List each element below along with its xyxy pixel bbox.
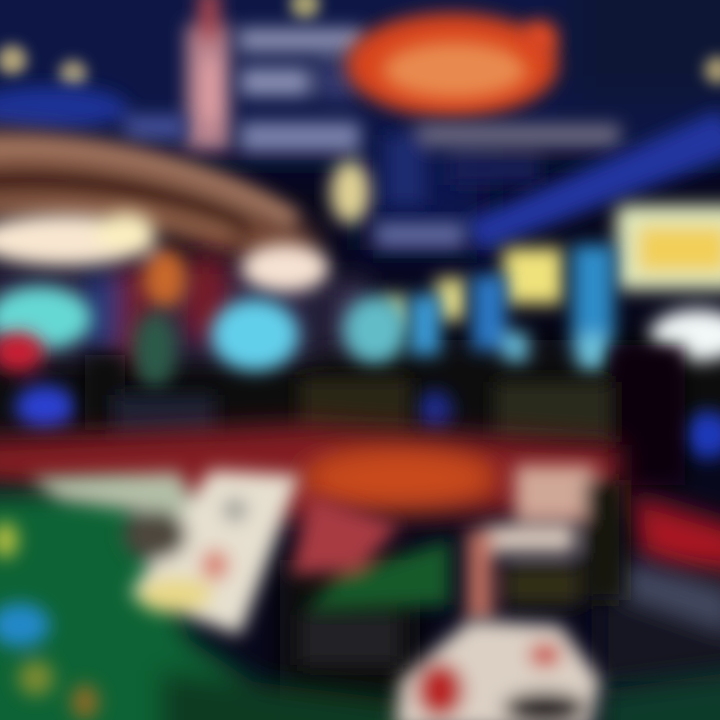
cream lamp	[330, 160, 370, 224]
lower dark floor	[280, 560, 720, 720]
table chips	[0, 522, 99, 720]
sign lettering band	[385, 124, 620, 205]
brown curved roof	[0, 130, 320, 290]
blue diagonal canopy	[465, 110, 720, 252]
tower	[186, 0, 230, 150]
white and red dice	[395, 620, 600, 720]
night sky	[0, 0, 720, 440]
stacked chips and dice	[467, 465, 625, 620]
blue dome	[0, 86, 185, 140]
red and blue accents	[0, 332, 720, 459]
green table	[0, 490, 720, 720]
playing cards	[30, 470, 300, 635]
coloured machine bank left	[0, 255, 370, 365]
blue columns	[410, 245, 614, 370]
white lights under roof	[0, 212, 329, 308]
grey-blue band	[375, 222, 465, 248]
dark figures	[85, 345, 685, 485]
marquee sign blocks	[238, 28, 363, 152]
sky lights	[0, 0, 720, 88]
red carpet	[0, 425, 720, 595]
red card and green felt	[290, 495, 450, 665]
orange oval sign	[346, 13, 558, 117]
glowing yellow signs	[385, 205, 720, 361]
cyan machine lights	[0, 286, 407, 388]
